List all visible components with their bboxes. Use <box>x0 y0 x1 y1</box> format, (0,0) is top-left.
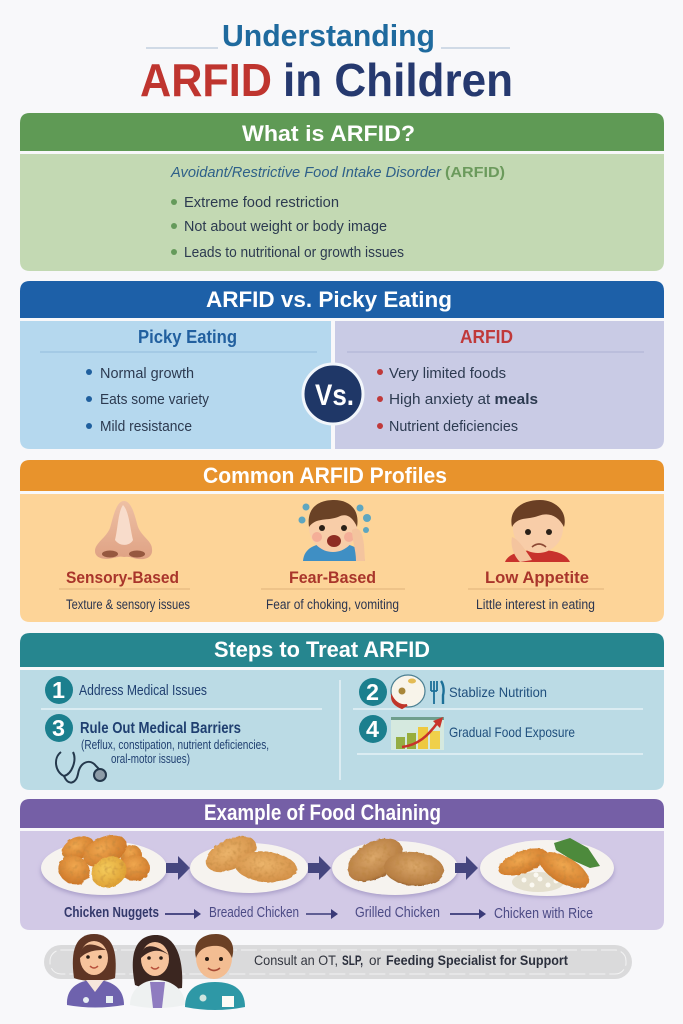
plate: grilled chicken <box>332 829 458 897</box>
vs badge <box>303 364 363 424</box>
column: ARFID: ARFID <box>460 327 513 347</box>
profile: sensory-based <box>59 568 190 612</box>
heading: common ARFID profiles: Common ARFID Profiles <box>203 463 447 488</box>
step 3: oral-motor issues) <box>111 752 190 766</box>
step 4: Gradual Food Exposure <box>449 724 575 740</box>
title <box>140 18 513 106</box>
callout: consult a specialist: Feeding Specialist for Support <box>386 952 568 968</box>
column: ARFID: Very limited foods <box>389 365 506 382</box>
vs badge: Vs. <box>315 379 354 412</box>
profile: low appetite: Low Appetite <box>485 568 589 587</box>
definition line: Avoidant/Restrictive Food Intake Disorder <box>170 165 442 181</box>
step 4 <box>359 715 575 743</box>
title: ARFID <box>140 54 272 106</box>
step 1: Address Medical Issues <box>79 683 207 699</box>
arrow <box>455 856 478 880</box>
plate: breaded chicken <box>190 829 308 895</box>
arrow <box>308 856 331 880</box>
title: in Children <box>283 54 513 106</box>
step 2: 2 <box>366 679 379 705</box>
column: picky eating: Eats some variety <box>100 391 209 408</box>
icon: nose <box>95 501 152 559</box>
profile: low appetite: Little interest in eating <box>476 597 595 612</box>
food chain labels: Chicken with Rice <box>494 905 593 922</box>
panel: steps to treat ARFID <box>20 633 664 790</box>
step 3 <box>45 714 269 766</box>
column: picky eating: Mild resistance <box>100 418 192 435</box>
profile: sensory-based: Sensory-Based <box>66 568 179 587</box>
icon: child with low appetite <box>505 500 570 562</box>
plate: chicken with rice <box>480 838 614 897</box>
food chain labels <box>64 904 593 922</box>
profile: fear-based <box>261 568 405 612</box>
plate: chicken nuggets <box>41 829 167 897</box>
food chain labels: Chicken Nuggets <box>64 904 159 921</box>
step 4: 4 <box>366 716 379 742</box>
panel: ARFID vs picky eating <box>20 281 664 449</box>
heading: example of food chaining: Example of Food Chaining <box>204 800 441 825</box>
bullet list <box>171 194 404 261</box>
profile: low appetite <box>468 568 604 612</box>
food chain labels: Breaded Chicken <box>209 904 299 921</box>
callout: consult a specialist <box>44 945 632 979</box>
step 3: 3 <box>52 715 65 741</box>
panel: common ARFID profiles <box>20 460 664 622</box>
heading: steps to treat ARFID: Steps to Treat ARFID <box>214 637 430 662</box>
step 2 <box>359 678 547 706</box>
bullet list: Leads to nutritional or growth issues <box>184 244 404 261</box>
icon: female clinician <box>67 934 124 1008</box>
panel: example of food chaining <box>20 799 664 930</box>
icon: growth chart <box>391 717 444 750</box>
icon: plate and cutlery <box>391 675 444 708</box>
profile: sensory-based: Texture & sensory issues <box>66 597 190 612</box>
icon: stethoscope <box>56 752 106 783</box>
column: picky eating: Normal growth <box>100 365 194 382</box>
food chain labels: Grilled Chicken <box>355 904 440 921</box>
column: ARFID: Nutrient deficiencies <box>389 418 518 435</box>
callout: consult a specialist: or <box>369 952 381 968</box>
heading: ARFID vs picky eating: ARFID vs. Picky Eating <box>206 287 452 312</box>
title: Understanding <box>222 18 435 53</box>
step 3: (Reflux, constipation, nutrient deficiencies, <box>81 738 269 752</box>
step 1: 1 <box>52 677 65 703</box>
icon: fearful child <box>298 500 371 561</box>
definition acronym: (ARFID) <box>445 164 505 181</box>
profile: fear-based: Fear-Based <box>289 568 376 587</box>
profile: fear-based: Fear of choking, vomiting <box>266 597 399 612</box>
bullet list: Not about weight or body image <box>184 218 387 235</box>
icon: male clinician <box>185 934 245 1010</box>
heading: what is ARFID: What is ARFID? <box>242 121 415 146</box>
column: ARFID: High anxiety at meals <box>389 391 538 408</box>
column: picky eating: Picky Eating <box>138 327 237 347</box>
column: picky eating <box>40 327 317 435</box>
arrow <box>166 856 190 880</box>
column: ARFID <box>347 327 644 435</box>
callout: consult a specialist: SLP, <box>342 952 363 968</box>
icon: doctor with white coat <box>130 935 185 1008</box>
step 3: Rule Out Medical Barriers <box>80 720 241 737</box>
bullet list: Extreme food restriction <box>184 194 339 211</box>
step 2: Stablize Nutrition <box>449 684 547 700</box>
callout: consult a specialist: Consult an OT, <box>254 952 338 968</box>
step 1 <box>45 676 207 704</box>
panel: what is ARFID <box>20 113 664 271</box>
